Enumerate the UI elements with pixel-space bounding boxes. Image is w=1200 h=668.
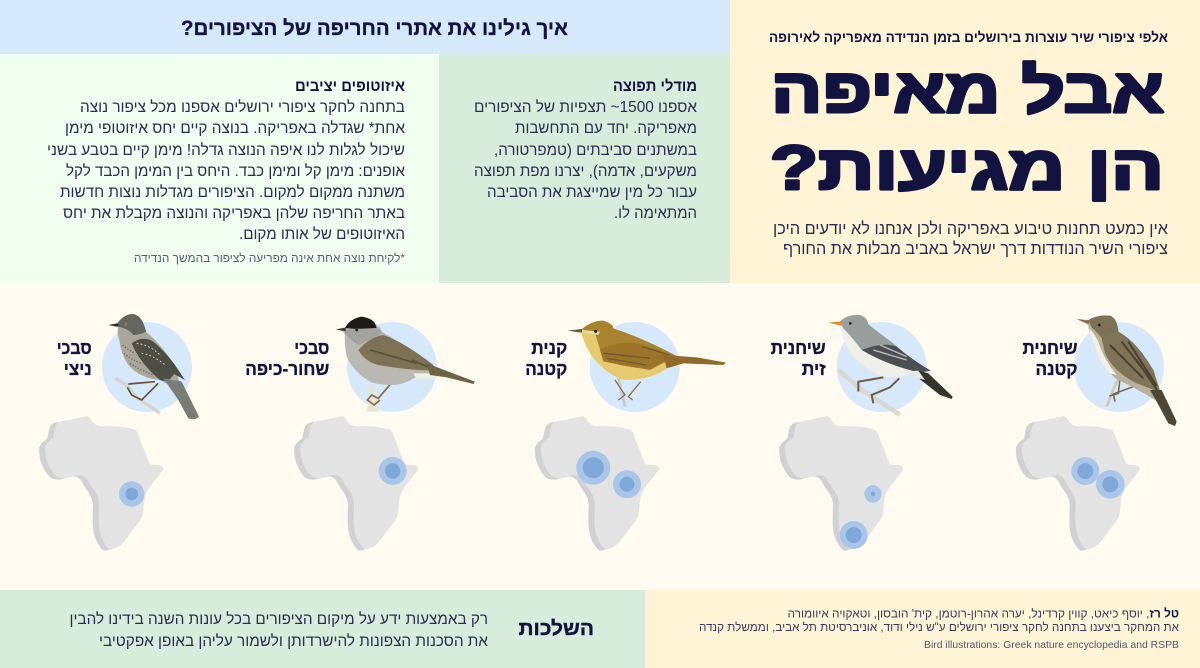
- Africa map: wintering sites: [535, 416, 659, 551]
- body: distribution models: מאפריקה. יחד עם התחשבות: [515, 120, 697, 137]
- name label: [771, 338, 826, 379]
- title: הן מגיעות?: [770, 134, 1164, 203]
- intro text: [773, 220, 1169, 258]
- authors and funding: טל רז, יוסף כיאט, קווין קרדינל, יערה אהרון-רוטמן, קית' הובסון, וטאקויה איוומורה: [788, 606, 1179, 620]
- name label: ניצי: [64, 359, 92, 379]
- bird illustration: [567, 321, 726, 412]
- species: reed warbler: [525, 321, 726, 551]
- intro text: אין כמעט תחנות טיבוע באפריקה ולכן אנחנו לא יודעים היכן: [773, 220, 1169, 238]
- panel: stable isotopes: [0, 54, 439, 283]
- Africa map: wintering sites: [294, 416, 418, 551]
- body: distribution models: המתאימה לו.: [614, 205, 697, 222]
- panel: title: [730, 0, 1200, 283]
- body: stable isotopes: האיזוטופים של אותו מקום.: [239, 226, 405, 243]
- body: distribution models: במשתנים סביבתים (טמפרטורה,: [494, 142, 697, 159]
- name label: קנית: [531, 338, 567, 358]
- name label: שיחנית: [1022, 338, 1078, 358]
- footnote: *לקיחת נוצה אחת אינה מפריעה לציפור בהמשך הנדידה: [134, 251, 405, 265]
- body: implications: [70, 611, 488, 650]
- Africa map: wintering sites: [1016, 416, 1140, 551]
- panel: implications: [0, 590, 645, 668]
- species: olive-tree warbler: [771, 315, 953, 551]
- Africa map: wintering sites: [779, 416, 903, 551]
- panel: how we discovered header: [0, 0, 730, 54]
- name label: קטנה: [525, 359, 567, 379]
- body: stable isotopes: משתנה ממקום למקום. הציפורים מגדלות נוצות חדשות: [60, 184, 405, 201]
- body: distribution models: [474, 99, 697, 222]
- body: distribution models: אספנו 1500~ תצפיות של הציפורים: [474, 99, 697, 116]
- name label: זית: [802, 359, 826, 379]
- kicker: אלפי ציפורי שיר עוצרות בירושלים בזמן הנדידה מאפריקה לאירופה: [769, 29, 1168, 45]
- heading: איך גילינו את אתרי החריפה של הציפורים?: [181, 17, 568, 40]
- body: stable isotopes: [47, 99, 405, 243]
- body: stable isotopes: אופנים: מימן קל ומימן כבד. היחס בין המימן הכבד לקל: [66, 163, 405, 180]
- body: stable isotopes: אחת* שגדלה באפריקה. בנוצה קיים יחס איזוטופי מימן: [65, 120, 405, 137]
- name label: [57, 338, 92, 379]
- name label: קטנה: [1036, 359, 1078, 379]
- name label: [525, 338, 567, 379]
- bird illustration: [828, 315, 953, 415]
- panel: distribution models: [439, 54, 730, 283]
- authors and funding: [699, 606, 1179, 634]
- body: stable isotopes: בתחנה לחקר ציפורי ירושלים אספנו מכל ציפור נוצה: [80, 99, 405, 116]
- body: implications: את הסכנות הצפונות להישרדותן ולשמור עליהן באופן אפקטיבי: [99, 633, 488, 650]
- heading: implications: השלכות: [518, 618, 594, 640]
- body: implications: רק באמצעות ידע על מיקום הציפורים בכל עונות השנה בידינו להבין: [70, 611, 488, 628]
- bird illustration: [1074, 316, 1177, 426]
- body: stable isotopes: באתר החריפה שלהן באפריקה והנוצה מקבלת את יחס: [63, 205, 405, 222]
- panel: credits: [645, 590, 1200, 668]
- species: barred warbler: [39, 314, 199, 551]
- name label: סבכי: [57, 338, 92, 358]
- heading: distribution models: מודלי תפוצה: [613, 78, 697, 95]
- heading: stable isotopes: איזוטופים יציבים: [295, 78, 405, 95]
- species: Savi's warbler: [1016, 316, 1177, 551]
- authors and funding: את המחקר ביצענו בתחנה לחקר ציפורי ירושלים ע"ש נילי ודוד, אוניברסיטת תל אביב, וממשלת קנדה: [699, 620, 1179, 634]
- body: distribution models: משקעים, אדמה), יצרנו מפת תפוצה: [474, 163, 697, 180]
- intro text: ציפורי השיר הנודדות דרך ישראל באביב מבלות את החורף: [783, 240, 1168, 258]
- name label: שחור-כיפה: [245, 359, 329, 379]
- title: אבל מאיפה: [771, 57, 1164, 126]
- name label: סבכי: [294, 338, 329, 358]
- Africa map: wintering sites: [39, 416, 163, 551]
- name label: [1022, 338, 1078, 379]
- body: distribution models: עבור כל מין שמייצגת את הסביבה: [487, 184, 697, 201]
- illustration credit: Bird illustrations: Greek nature encyclopedia and RSPB: [924, 639, 1179, 651]
- species: blackcap: [245, 317, 475, 551]
- bird illustration: [102, 314, 199, 419]
- body: stable isotopes: שיכול לגלות לנו איפה הנוצה גדלה! מימן קיים בטבע בשני: [47, 142, 405, 159]
- bird illustration: [336, 317, 475, 412]
- title: [770, 57, 1164, 203]
- name label: שיחנית: [771, 338, 826, 358]
- name label: [245, 338, 329, 379]
